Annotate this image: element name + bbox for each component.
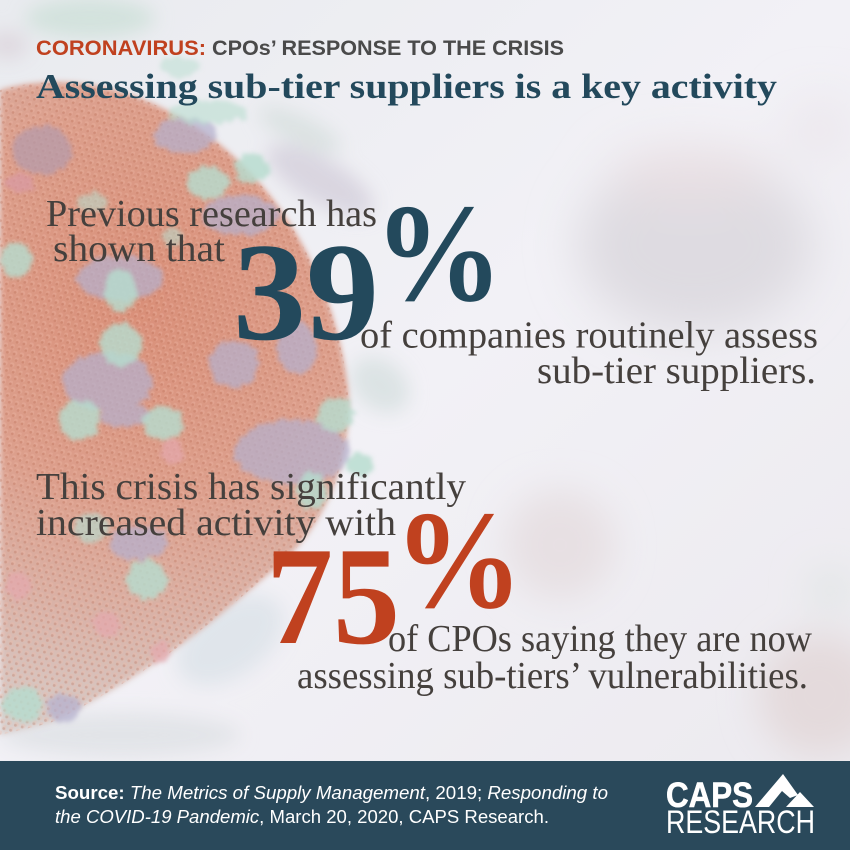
text: CPOs assessing: of CPOs saying they are now [388, 618, 813, 660]
source citation: Source: The Metrics of Supply Management , 2019; Responding to [55, 783, 608, 803]
virus body [0, 82, 348, 735]
source citation [55, 783, 608, 827]
text: routinely assess: sub-tier suppliers. [537, 350, 816, 392]
percent sign: 75: % [394, 483, 523, 638]
statistic block: 39 percent [46, 176, 818, 392]
logo: CAPS Research: CAPS [666, 776, 753, 815]
kicker heading: CORONAVIRUS: [36, 37, 206, 60]
blurred virus lower centre [505, 490, 615, 600]
blurred virus upper right [577, 100, 850, 333]
title: Assessing sub-tier suppliers is a key activity [36, 67, 778, 106]
source citation: the COVID-19 Pandemic , March 20, 2020, CAPS Research. [55, 807, 549, 827]
text: crisis increased activity: This crisis has significantly [36, 466, 466, 508]
logo: CAPS Research [666, 774, 815, 840]
spike proteins [0, 57, 373, 723]
footer band [0, 761, 850, 850]
number: 39: 39 [233, 215, 379, 370]
number: 75: 75 [266, 519, 400, 674]
text: CPOs assessing: assessing sub-tiers’ vulnerabilities. [297, 655, 808, 697]
text: routinely assess: of companies routinely assess [360, 314, 818, 356]
kicker heading: CPOs’ RESPONSE TO THE CRISIS [212, 37, 564, 60]
text: previous research: Previous research has [46, 193, 377, 235]
blurred spikes behind [0, 0, 420, 757]
icon: mountain [755, 774, 814, 807]
statistic block: 75 percent [36, 466, 813, 697]
percent sign: 39: % [374, 176, 503, 331]
blurred virus lower right [758, 568, 850, 757]
logo: CAPS Research: RESEARCH [666, 804, 815, 840]
text: crisis increased activity: increased activity with [36, 502, 396, 544]
text: previous research: shown that [53, 228, 225, 270]
